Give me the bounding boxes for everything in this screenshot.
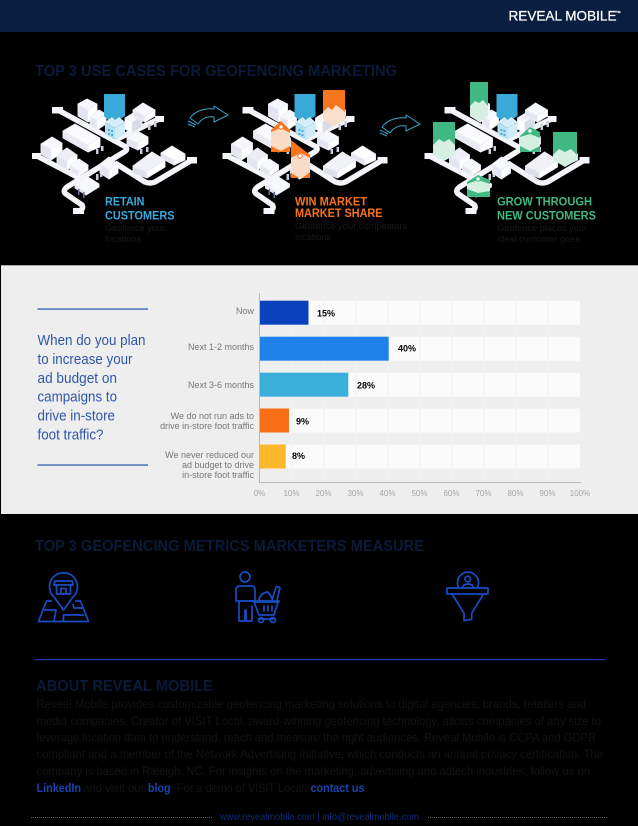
bar chart: 30% — [347, 489, 364, 498]
about body text: . For a demo of VISIT Local, — [171, 781, 307, 795]
about body text — [36, 697, 603, 795]
bar chart: 0% — [254, 489, 265, 498]
bar chart: 50% — [411, 489, 428, 498]
bar chart: 40% — [379, 489, 396, 498]
bar chart: drive in-store foot traffic — [160, 421, 254, 431]
about body text: . — [365, 781, 368, 795]
question text block: drive in-store — [38, 408, 115, 424]
bar chart: 100% — [570, 489, 590, 498]
icon: shopper with cart — [236, 572, 280, 622]
question text block — [38, 308, 148, 466]
bar chart: 15% — [317, 308, 335, 318]
about body text: company is based in Raleigh, NC. For insights on the marketing, advertising and adtech industries, follow us on — [36, 764, 590, 778]
question text block: ad budget on — [38, 370, 117, 387]
divider — [35, 659, 605, 660]
caption: win market share: Geofence your competitors' — [295, 221, 409, 232]
bar chart: in-store foot traffic — [182, 470, 254, 480]
bar chart: Now — [236, 306, 254, 316]
icon: customer funnel — [447, 572, 488, 621]
bar chart: Next 3-6 months — [188, 380, 254, 390]
caption: retain customers: locations — [105, 234, 141, 245]
bar chart: 9% — [296, 416, 309, 426]
question text block: campaigns to — [38, 388, 117, 406]
illustration: retain customers — [32, 94, 197, 214]
bar chart: Next 1-2 months — [188, 342, 254, 352]
about body text: LinkedIn — [36, 781, 81, 795]
question text block: to increase your — [38, 351, 132, 368]
heading: about: ABOUT REVEAL MOBILE — [36, 678, 213, 695]
bar chart: 20% — [315, 489, 332, 498]
about body text: contact us — [310, 781, 365, 795]
panel: survey chart — [1, 265, 638, 514]
caption: retain customers — [105, 194, 174, 245]
about body text: and visit our — [83, 781, 144, 795]
bar chart: 90% — [539, 489, 556, 498]
bar chart: 10% — [283, 489, 300, 498]
bar chart: 80% — [507, 489, 524, 498]
bar chart: We do not run ads to — [171, 411, 254, 421]
illustration: win market share — [222, 90, 388, 214]
header bar — [0, 0, 638, 32]
about body text: media companies. Creator of VISIT Local, award-winning geofencing technology, allows companies of any size to — [36, 714, 601, 728]
arrow 1 — [188, 106, 228, 127]
caption: grow through new customers: NEW CUSTOMERS — [497, 208, 596, 222]
icon: store map pin — [38, 573, 88, 622]
caption: grow through new customers: GROW THROUGH — [497, 194, 592, 208]
question text block: foot traffic? — [38, 426, 104, 444]
arrow 2 — [380, 115, 420, 136]
bar chart: ad budget to drive — [182, 460, 254, 470]
bar chart: 70% — [475, 489, 492, 498]
about body text: compliant and a member of the Network Advertising Initiative, which conducts an annual privacy certification. The — [36, 747, 603, 761]
question text block: When do you plan — [38, 332, 146, 349]
bar chart — [160, 293, 590, 498]
about body text: blog — [148, 781, 170, 795]
caption: grow through new customers — [497, 194, 596, 245]
about body text: leverage location data to understand, reach and measure the right audiences. Reveal Mobile is CCPA and GDPR — [36, 730, 596, 744]
logo: REVEAL MOBILE — [508, 8, 616, 24]
bar chart: 28% — [357, 380, 375, 390]
heading: use cases: TOP 3 USE CASES FOR GEOFENCING MARKETING — [35, 63, 397, 80]
about body text: Reveal Mobile provides customizable geofencing marketing solutions to digital agencies, brands, retailers and — [36, 697, 586, 711]
caption: retain customers: RETAIN — [105, 194, 144, 208]
illustration: grow through new customers — [424, 82, 590, 214]
caption: grow through new customers: Geofence places your — [497, 223, 587, 234]
caption: retain customers: CUSTOMERS — [105, 208, 174, 222]
bar chart: 8% — [292, 451, 305, 461]
caption: grow through new customers: ideal customer goes — [497, 234, 580, 245]
footer: www.revealmobile.com | info@revealmobile.com — [219, 811, 419, 823]
caption: win market share: MARKET SHARE — [295, 206, 382, 220]
bar chart: 40% — [398, 344, 416, 354]
logo: TM — [616, 10, 621, 14]
caption: win market share: locations — [295, 232, 331, 243]
bar chart: We never reduced our — [165, 450, 254, 460]
caption: win market share: WIN MARKET — [295, 194, 368, 208]
bar chart: 60% — [443, 489, 460, 498]
heading: metrics: TOP 3 GEOFENCING METRICS MARKETERS MEASURE — [35, 538, 424, 555]
caption: win market share — [295, 194, 409, 243]
caption: retain customers: Geofence your — [105, 223, 165, 234]
about section — [36, 678, 603, 795]
